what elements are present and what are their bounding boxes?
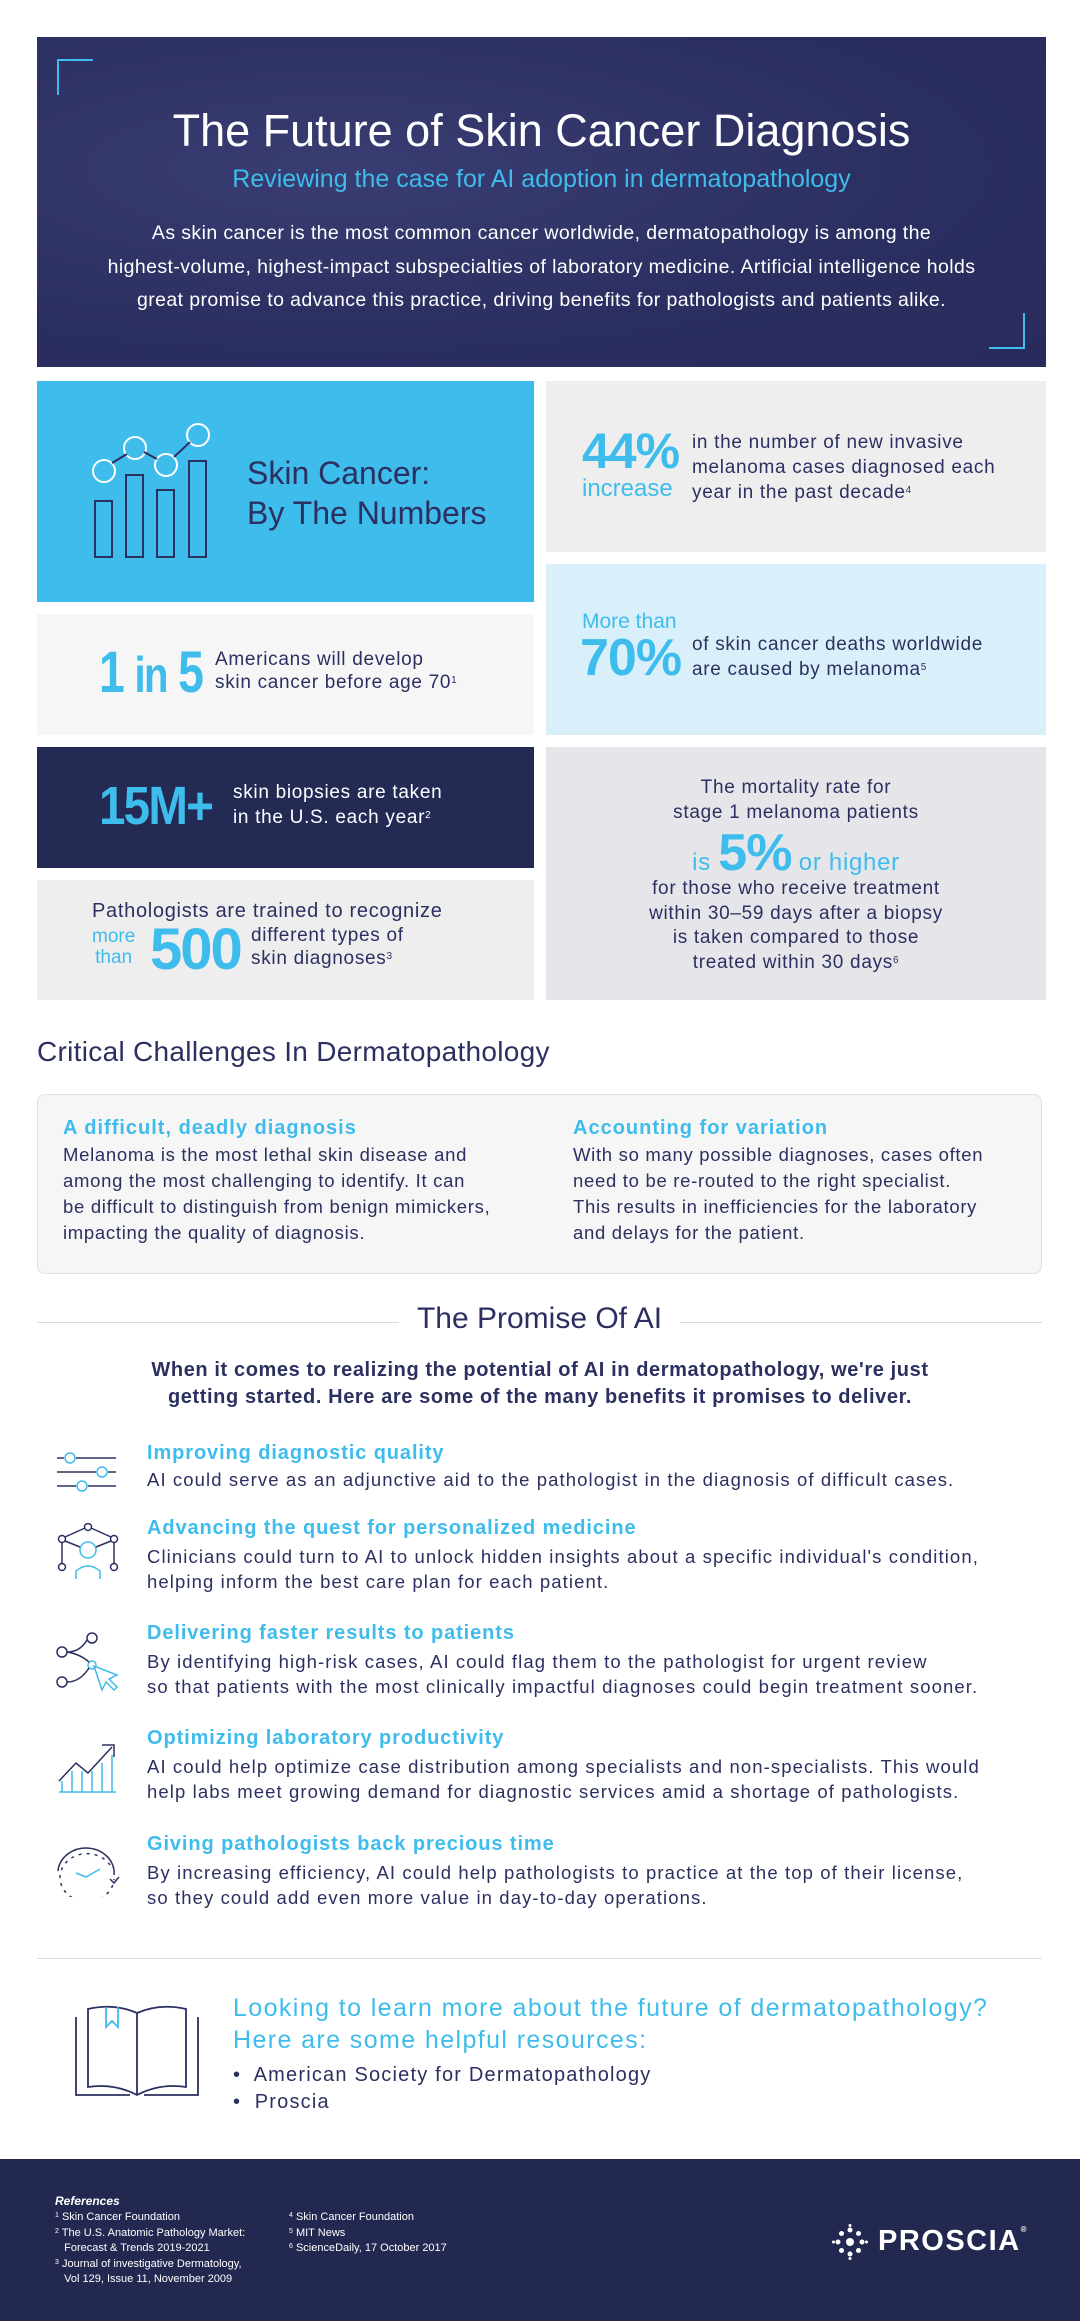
icon: nodes with cursor <box>56 1632 119 1692</box>
heading: By The Numbers <box>247 495 486 531</box>
benefit: faster results: so that patients with the most clinically impactful diagnoses could begin treatment sooner. <box>147 1676 978 1697</box>
stat: 44%: increase <box>582 475 673 502</box>
stat: 15M+: 15M+ <box>99 776 212 836</box>
subtitle: Reviewing the case for AI adoption in dermatopathology <box>232 165 851 193</box>
heading: Skin Cancer: <box>247 455 430 491</box>
footer: 3 Journal of investigative Dermatology, <box>55 2258 242 2270</box>
footer: 6 ScienceDaily, 17 October 2017 <box>289 2242 447 2254</box>
footer: 1 Skin Cancer Foundation <box>55 2211 180 2223</box>
stat: 15M+: skin biopsies are taken <box>233 782 442 803</box>
benefit: personalized medicine: Advancing the quest for personalized medicine <box>147 1517 636 1539</box>
stat: 5% mortality: The mortality rate for <box>701 777 891 798</box>
benefit: lab productivity: AI could help optimize case distribution among specialists and non-specialists. This would <box>147 1756 980 1777</box>
icon: rising chart <box>58 1744 116 1793</box>
stat: 15M+: in the U.S. each year2 <box>233 807 431 828</box>
benefit: personalized medicine <box>58 1517 979 1592</box>
icon: sliders <box>57 1452 116 1492</box>
icon: clock <box>57 1847 120 1897</box>
resources block: Here are some helpful resources: <box>233 2026 647 2054</box>
benefit: faster results <box>56 1622 978 1697</box>
stat: 5% mortality: within 30–59 days after a biopsy <box>649 903 943 924</box>
challenge: variation: This results in inefficiencies for the laboratory <box>573 1196 977 1217</box>
challenge: variation: need to be re-routed to the right specialist. <box>573 1170 951 1191</box>
challenge: difficult diagnosis: among the most challenging to identify. It can <box>63 1170 465 1191</box>
benefit: personalized medicine: Clinicians could turn to AI to unlock hidden insights about a specific individual's condition, <box>147 1546 979 1567</box>
footer: 5 MIT News <box>289 2226 345 2238</box>
stat: 44%: 44% <box>582 423 679 479</box>
benefit: lab productivity <box>58 1727 980 1802</box>
benefit: lab productivity: Optimizing laboratory productivity <box>147 1727 504 1749</box>
stat: 5% mortality: stage 1 melanoma patients <box>673 802 919 823</box>
benefit: time: Giving pathologists back precious time <box>147 1833 555 1855</box>
stat: 70%: of skin cancer deaths worldwide <box>692 634 983 655</box>
stat: 70%: are caused by melanoma5 <box>692 659 927 680</box>
intro text: promise <box>151 1359 929 1408</box>
title: The Future of Skin Cancer Diagnosis <box>173 105 910 156</box>
benefit: diagnostic quality <box>57 1442 954 1492</box>
footer: 4 Skin Cancer Foundation <box>289 2211 414 2223</box>
benefit: diagnostic quality: AI could serve as an adjunctive aid to the pathologist in the diagnosis of difficult cases. <box>147 1469 954 1490</box>
resources block: • American Society for Dermatopathology <box>233 2064 652 2086</box>
intro paragraph: great promise to advance this practice, driving benefits for pathologists and patients alike. <box>137 289 946 311</box>
stat: 44%: in the number of new invasive <box>692 432 964 453</box>
stat: 5% mortality: is 5% or higher <box>692 824 900 882</box>
stat: 1 in 5: 1 in 5 <box>99 640 202 705</box>
header panel <box>37 37 1046 367</box>
challenge: difficult diagnosis: impacting the quality of diagnosis. <box>63 1222 365 1243</box>
panel: challenges <box>37 1094 1042 1274</box>
heading: critical challenges: Critical Challenges In Dermatopathology <box>37 1036 550 1067</box>
stat: 500: skin diagnoses3 <box>251 948 393 969</box>
footer: 2 The U.S. Anatomic Pathology Market: <box>55 2226 245 2238</box>
logo: proscia <box>832 2224 1028 2260</box>
benefit: personalized medicine: helping inform the best care plan for each patient. <box>147 1571 609 1592</box>
benefit: lab productivity: help labs meet growing demand for diagnostic services amid a shortage of pathologists. <box>147 1781 959 1802</box>
stat: 500: than <box>95 947 132 968</box>
benefit: time <box>57 1833 963 1908</box>
intro paragraph: As skin cancer is the most common cancer worldwide, dermatopathology is among the <box>152 222 931 244</box>
heading: promise of AI: The Promise Of AI <box>417 1302 662 1335</box>
stat: 500: 500 <box>150 917 241 982</box>
resources block: Looking to learn more about the future of dermatopathology? <box>233 1994 988 2022</box>
intro paragraph: highest-volume, highest-impact subspecialties of laboratory medicine. Artificial intelligence holds <box>108 256 975 278</box>
stat: 500: Pathologists are trained to recognize <box>92 900 443 922</box>
challenge: variation <box>573 1117 983 1243</box>
stat: 500: different types of <box>251 925 404 946</box>
stat: 44%: melanoma cases diagnosed each <box>692 457 995 478</box>
stat: 5% mortality <box>546 747 1046 1000</box>
corner bracket top-left <box>57 59 93 95</box>
challenge: variation: Accounting for variation <box>573 1117 828 1139</box>
stat: 5% mortality: is taken compared to those <box>673 927 919 948</box>
panel: skin cancer by the numbers <box>37 381 534 602</box>
stat: 5% mortality: for those who receive treatment <box>652 878 940 899</box>
intro paragraph <box>108 222 975 311</box>
icon: bar chart <box>92 423 210 558</box>
stat: 1 in 5: skin cancer before age 701 <box>215 672 457 693</box>
challenge: difficult diagnosis: A difficult, deadly diagnosis <box>63 1117 357 1139</box>
challenge: variation: and delays for the patient. <box>573 1222 805 1243</box>
footer: Vol 129, Issue 11, November 2009 <box>64 2273 232 2285</box>
icon: network person <box>58 1523 118 1579</box>
stat: 1 in 5: Americans will develop <box>215 649 424 670</box>
stat: 15M+ <box>37 747 534 868</box>
stat: 500: more <box>92 926 135 947</box>
corner bracket bottom-right <box>989 313 1025 349</box>
footer: Forecast & Trends 2019-2021 <box>64 2242 210 2254</box>
resources block: • Proscia <box>233 2091 330 2113</box>
intro text: promise: getting started. Here are some of the many benefits it promises to deliver. <box>168 1386 912 1408</box>
logo: proscia: PROSCIA® <box>878 2225 1028 2257</box>
stat: 1 in 5 <box>37 614 534 735</box>
footer <box>0 2159 1080 2321</box>
challenge: variation: With so many possible diagnoses, cases often <box>573 1144 983 1165</box>
challenge: difficult diagnosis: be difficult to distinguish from benign mimickers, <box>63 1196 490 1217</box>
stat: 70%: More than <box>582 610 677 633</box>
challenge: difficult diagnosis: Melanoma is the most lethal skin disease and <box>63 1144 467 1165</box>
stat: 500 <box>37 880 534 1000</box>
benefit: faster results: Delivering faster results to patients <box>147 1622 515 1644</box>
benefit: time: By increasing efficiency, AI could help pathologists to practice at the top of their license, <box>147 1862 963 1883</box>
stat: 44%: year in the past decade4 <box>692 482 912 503</box>
icon: open book <box>75 2006 199 2096</box>
benefit: diagnostic quality: Improving diagnostic quality <box>147 1442 444 1464</box>
challenge: difficult diagnosis <box>63 1117 490 1243</box>
intro text: promise: When it comes to realizing the potential of AI in dermatopathology, we're just <box>151 1359 929 1381</box>
stat: 5% mortality: treated within 30 days6 <box>693 952 899 973</box>
stat: 70%: 70% <box>580 629 681 687</box>
benefit: faster results: By identifying high-risk cases, AI could flag them to the pathologist for urgent review <box>147 1651 928 1672</box>
stat: 70% <box>546 564 1046 735</box>
references: References <box>55 2194 120 2208</box>
resources block <box>233 1994 988 2113</box>
heading <box>247 455 486 531</box>
stat: 44% <box>546 381 1046 552</box>
benefit: time: so they could add even more value in day-to-day operations. <box>147 1887 708 1908</box>
